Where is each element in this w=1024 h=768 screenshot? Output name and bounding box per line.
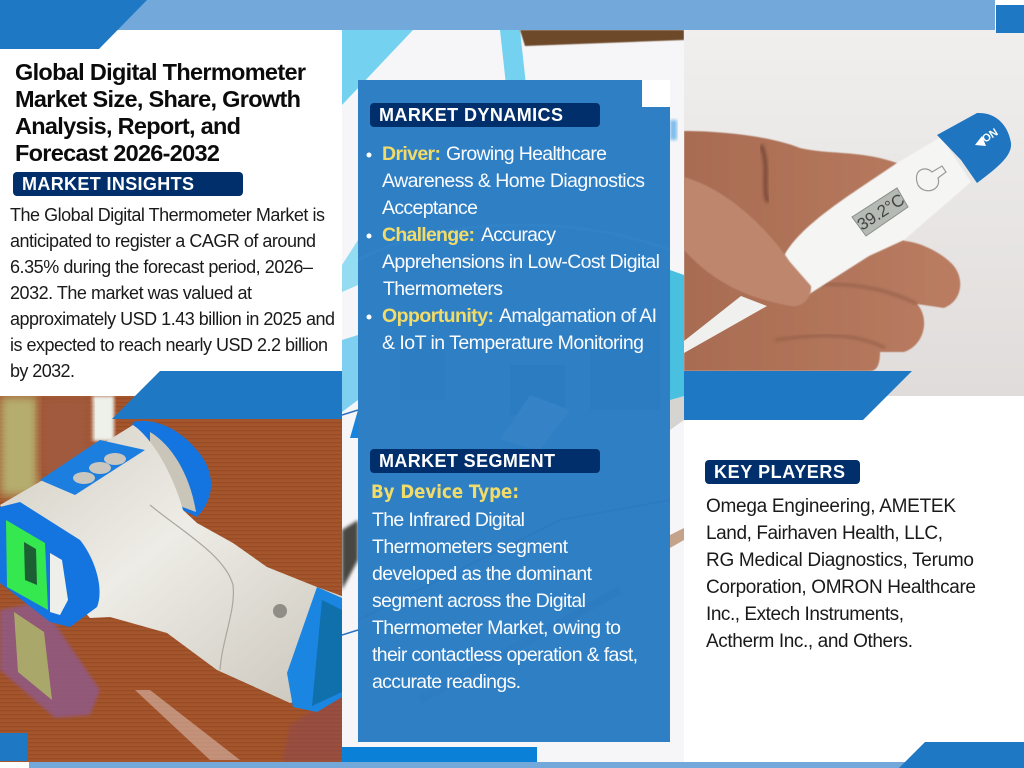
bottom-right blue accent shape [899,742,1024,768]
title: Market Size, Share, Growth [15,86,301,112]
photo: infrared thermometer on wooden table [0,396,342,762]
right blue accent shape [684,371,912,420]
text block: opportunity: Amalgamation of AI [499,305,657,327]
text block: key players: Land, Fairhaven Health, LLC, [706,523,943,544]
photo: thermometer held in hand [684,30,1024,396]
heading: market insights: MARKET INSIGHTS [22,174,194,194]
text block: segment description: accurate readings. [372,671,521,693]
text block: market insights: is expected to reach nearly USD 2.2 billion [10,335,328,355]
top-left blue accent shape [0,0,147,49]
text block: driver: Awareness & Home Diagnostics [382,170,645,192]
back blue cap [132,420,212,517]
blue front face [0,502,100,627]
top-right blue square [996,5,1024,33]
photo: thermometer held in hand: 39.2°C [854,190,908,234]
heading: market insights [13,172,243,196]
text block: key players: Actherm Inc., and Others. [706,631,913,652]
text block: driver: Acceptance [382,197,478,219]
photo: market chart background [342,30,684,762]
blue end cap [287,587,342,712]
text block: segment description: segment across the Digital [372,590,586,612]
text block: challenge [366,224,660,300]
text block: driver: Driver: [382,143,441,165]
text block: market insights: 2032. The market was valued at [10,283,252,303]
blue cap [937,113,1011,183]
text block: segment description: their contactless operation & fast, [372,644,638,666]
text block: segment description: The Infrared Digital [372,509,525,531]
bottom-left blue square [0,733,28,761]
title: Analysis, Report, and [15,113,241,139]
green display [6,520,48,610]
text block: challenge: Accuracy [481,224,556,246]
white thermometer body [784,137,971,300]
text block: key players [706,496,976,652]
heading: market segment [370,449,600,473]
text block: segment description: Thermometers segment [372,536,569,558]
text block: segment description [372,509,638,693]
thumb [684,177,811,306]
text block: opportunity [366,305,657,354]
photo: thermometer held in hand: ON [980,126,1001,146]
title: Forecast 2026-2032 [15,140,220,166]
panel: market dynamics and segment [358,80,670,742]
LCD display [852,188,908,236]
gun head and handle [0,425,342,703]
text block: key players: RG Medical Diagnostics, Terumo [706,550,974,571]
heading: market dynamics: MARKET DYNAMICS [379,105,563,125]
heading: key players: KEY PLAYERS [714,462,845,482]
text block: key players: Inc., Extech Instruments, [706,604,904,625]
text block: market insights: by 2032. [10,361,75,381]
text block: segment description: Thermometer Market, owing to [372,617,621,639]
heading: market dynamics [370,103,600,127]
text block: market insights: approximately USD 1.43 billion in 2025 and [10,309,335,329]
text block: opportunity: & IoT in Temperature Monitoring [382,332,644,354]
subheading: by device type: By Device Type: [371,481,519,503]
text block: market insights: The Global Digital Thermometer Market is [10,205,325,225]
text block: market insights: 6.35% during the forecast period, 2026– [10,257,313,277]
title [15,59,306,166]
left blue accent shape [112,371,342,419]
blue button panel [40,440,145,495]
text block: challenge: Challenge: [382,224,475,246]
text block: challenge: Apprehensions in Low-Cost Digital [382,251,660,273]
text block: driver: Growing Healthcare [446,143,607,165]
hand [684,131,960,371]
bottom light-blue bar [29,762,929,768]
title: Global Digital Thermometer [15,59,306,85]
text block: key players: Omega Engineering, AMETEK [706,496,956,517]
text block: market insights [10,205,335,381]
text block: key players: Corporation, OMRON Healthcare [706,577,976,598]
top light-blue header bar [100,0,995,30]
text block: market insights: anticipated to register a CAGR of around [10,231,316,251]
text block: challenge: Thermometers [383,278,503,300]
text block: segment description: developed as the dominant [372,563,593,585]
text block: driver [366,143,645,219]
text block: opportunity: Opportunity: [382,305,494,327]
heading: market segment: MARKET SEGMENT [379,451,555,471]
